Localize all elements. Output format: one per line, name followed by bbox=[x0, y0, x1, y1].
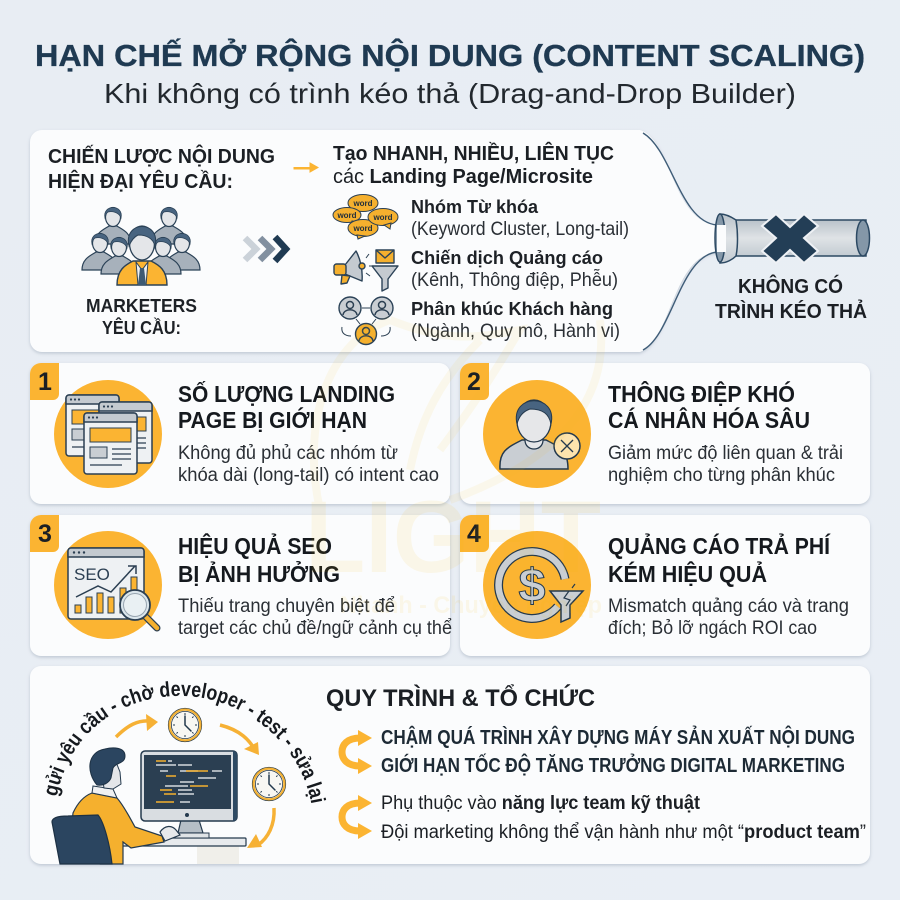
watermark logo: LIGHT bbox=[305, 480, 601, 594]
label: marketers: YÊU CẦU: bbox=[102, 317, 181, 338]
list: customer segment bbox=[411, 298, 620, 342]
description 1: Không đủ phủ các nhóm từ bbox=[178, 443, 398, 464]
icon: chevrons bbox=[245, 237, 286, 261]
watermark logo bbox=[305, 320, 602, 619]
panel 2: personalised message bbox=[460, 363, 870, 504]
description 3: Thiếu trang chuyên biệt để bbox=[178, 596, 395, 617]
label: no drag and drop builder: KHÔNG CÓ bbox=[738, 274, 843, 298]
icon: keyword bubbles: word bbox=[336, 211, 357, 220]
icon: marketers group bbox=[82, 208, 200, 285]
heading: strategy demand bbox=[48, 144, 275, 193]
badge 4: 4 bbox=[467, 520, 481, 548]
heading 2 bbox=[608, 380, 810, 433]
icon: loop arrows two bbox=[342, 795, 372, 839]
heading 4 bbox=[608, 531, 831, 587]
list: ad campaign bbox=[411, 247, 618, 291]
icon: clock two bbox=[252, 768, 286, 800]
panel 4: paid ads bbox=[460, 515, 870, 656]
text: technical dependency: Đội marketing không thể vận hành như một “product team” bbox=[381, 822, 866, 843]
heading 3 bbox=[178, 531, 340, 587]
heading 2: THÔNG ĐIỆP KHÓ bbox=[608, 380, 795, 407]
icon: blocked pipe bbox=[715, 214, 870, 263]
description 4 bbox=[608, 596, 849, 639]
icon: loop arrows one bbox=[342, 730, 372, 774]
list: customer segment: Phân khúc Khách hàng bbox=[411, 298, 613, 319]
description 2: Giảm mức độ liên quan & trải bbox=[608, 443, 843, 464]
badge 2: 2 bbox=[467, 368, 481, 396]
description 2: nghiệm cho từng phân khúc bbox=[608, 465, 835, 486]
icon: clock one bbox=[168, 708, 202, 742]
process arrows bbox=[116, 714, 274, 848]
icon: customer segments bbox=[339, 297, 393, 344]
label: no drag and drop builder bbox=[715, 274, 867, 323]
icon: megaphone, mail and funnel bbox=[334, 250, 398, 291]
description 3 bbox=[178, 596, 452, 639]
watermark logo: Nhanh - Chuyên nghiệp bbox=[340, 592, 602, 619]
text: technical dependency: Phụ thuộc vào năng lực team kỹ thuật bbox=[381, 793, 701, 814]
icon: keyword bubbles: word bbox=[352, 224, 373, 233]
subtitle: Khi không có trình kéo thả (Drag-and-Drop Builder) bbox=[104, 78, 796, 109]
curved process text: gửi yêu cầu - chờ developer - test - sửa lại bbox=[45, 681, 326, 803]
heading 1: PAGE BỊ GIỚI HẠN bbox=[178, 406, 367, 433]
description 1: khóa dài (long-tail) có intent cao bbox=[178, 465, 439, 486]
heading 2: CÁ NHÂN HÓA SÂU bbox=[608, 406, 810, 433]
panel 1: landing page count bbox=[30, 363, 450, 504]
badge 4 bbox=[460, 515, 489, 552]
heading: process: QUY TRÌNH & TỔ CHỨC bbox=[326, 684, 595, 712]
description 4: Mismatch quảng cáo và trang bbox=[608, 596, 849, 617]
icon: page windows bbox=[54, 380, 162, 488]
icon: dollar and broken funnel: $ bbox=[518, 559, 546, 611]
list: keyword cluster bbox=[411, 196, 629, 240]
panel: modern content strategy requirements bbox=[30, 130, 717, 352]
title: HẠN CHẾ MỞ RỘNG NỘI DUNG (CONTENT SCALING) bbox=[35, 37, 865, 73]
icon: keyword bubbles: word bbox=[372, 213, 393, 222]
panel 5: process and organisation bbox=[28, 666, 872, 867]
description 3: target các chủ đề/ngữ cảnh cụ thể bbox=[178, 618, 452, 639]
list: keyword cluster: Nhóm Từ khóa bbox=[411, 196, 539, 217]
text: create fast: Tạo NHANH, NHIỀU, LIÊN TỤC bbox=[333, 141, 614, 165]
badge 2 bbox=[460, 363, 489, 400]
list: keyword cluster: (Keyword Cluster, Long-tail) bbox=[411, 219, 629, 240]
badge 1 bbox=[30, 363, 59, 400]
arrow: to requirement bbox=[294, 163, 318, 172]
label: marketers: MARKETERS bbox=[86, 295, 197, 316]
text: technical dependency bbox=[381, 793, 866, 843]
heading: strategy demand: HIỆN ĐẠI YÊU CẦU: bbox=[48, 169, 233, 193]
description 2 bbox=[608, 443, 843, 486]
panel 3: seo bbox=[30, 515, 452, 656]
icon: dollar and broken funnel bbox=[483, 531, 591, 639]
text: create fast: các Landing Page/Microsite bbox=[333, 166, 593, 188]
text: slows content machine bbox=[381, 725, 855, 777]
list: ad campaign: Chiến dịch Quảng cáo bbox=[411, 247, 603, 268]
badge 1: 1 bbox=[38, 368, 52, 396]
icon: seo chart with magnifier bbox=[54, 531, 162, 639]
icon: seo chart with magnifier: SEO bbox=[74, 565, 110, 584]
heading 4: KÉM HIỆU QUẢ bbox=[608, 559, 767, 587]
badge 3 bbox=[30, 515, 59, 552]
label: no drag and drop builder: TRÌNH KÉO THẢ bbox=[715, 300, 867, 323]
heading 1 bbox=[178, 380, 395, 433]
icon: keyword bubbles: word bbox=[352, 199, 373, 208]
heading 3: HIỆU QUẢ SEO bbox=[178, 531, 332, 559]
text: create fast bbox=[333, 141, 614, 188]
description 4: đích; Bỏ lỡ ngách ROI cao bbox=[608, 618, 817, 639]
list: ad campaign: (Kênh, Thông điệp, Phễu) bbox=[411, 269, 618, 291]
heading 1: SỐ LƯỢNG LANDING bbox=[178, 380, 395, 407]
heading 4: QUẢNG CÁO TRẢ PHÍ bbox=[608, 531, 831, 559]
icon: keyword bubbles bbox=[333, 194, 398, 239]
description 1 bbox=[178, 443, 439, 486]
label: marketers bbox=[86, 295, 197, 338]
list: customer segment: (Ngành, Quy mô, Hành vi) bbox=[411, 321, 620, 342]
badge 3: 3 bbox=[38, 520, 52, 548]
icon: person with x bbox=[483, 380, 591, 488]
heading: strategy demand: CHIẾN LƯỢC NỘI DUNG bbox=[48, 144, 275, 168]
illustration: developer at computer bbox=[52, 748, 246, 864]
heading 3: BỊ ẢNH HƯỞNG bbox=[178, 559, 340, 587]
